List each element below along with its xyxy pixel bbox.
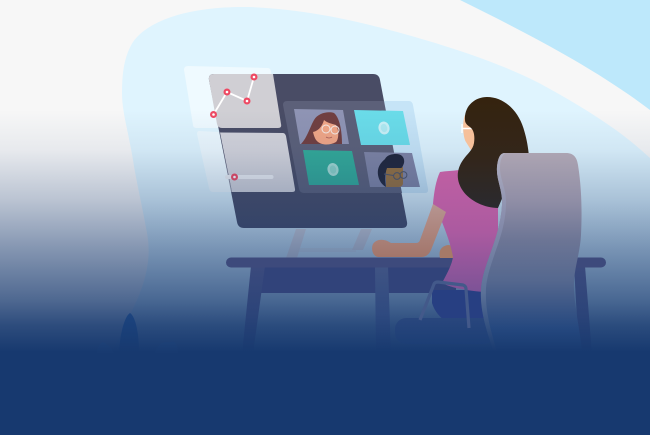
woman smile — [326, 137, 332, 138]
far hand — [439, 245, 456, 258]
chair back edge — [481, 153, 506, 352]
chair back — [481, 153, 582, 352]
shirt — [433, 170, 498, 293]
monitor stand — [286, 229, 372, 258]
sky corner shape — [460, 0, 650, 110]
video tile: cyan — [354, 110, 410, 145]
face — [463, 115, 480, 150]
video panel — [283, 101, 402, 193]
man hair — [378, 154, 404, 187]
woman glasses — [322, 125, 339, 134]
slider translucent card — [197, 131, 232, 192]
video tile: woman — [294, 109, 349, 145]
video back card — [384, 101, 428, 193]
slider control — [225, 175, 274, 179]
man face — [386, 167, 403, 187]
pants — [432, 290, 488, 326]
chart panel — [209, 74, 281, 128]
video tile: man — [364, 152, 420, 187]
glasses — [462, 124, 473, 133]
desk top — [226, 258, 606, 268]
man glasses — [384, 172, 407, 179]
armrest — [420, 282, 469, 328]
plant small leaves — [97, 342, 178, 354]
chair seat — [395, 318, 495, 344]
video tile: green — [303, 150, 359, 185]
plant tall leaf — [119, 313, 139, 352]
monitor — [184, 66, 428, 228]
desk — [226, 258, 606, 354]
line chart — [211, 75, 256, 117]
arm — [372, 204, 446, 257]
woman face — [313, 120, 338, 145]
slider panel — [220, 132, 295, 192]
woman hair — [301, 112, 342, 144]
monitor body — [209, 74, 407, 228]
chart translucent card — [184, 66, 279, 128]
hair — [458, 97, 529, 208]
desk middle leg — [375, 266, 391, 354]
desk right leg — [574, 266, 592, 354]
desk left leg — [242, 266, 265, 354]
plant — [97, 313, 178, 354]
person — [372, 97, 582, 352]
desk apron — [261, 266, 456, 293]
